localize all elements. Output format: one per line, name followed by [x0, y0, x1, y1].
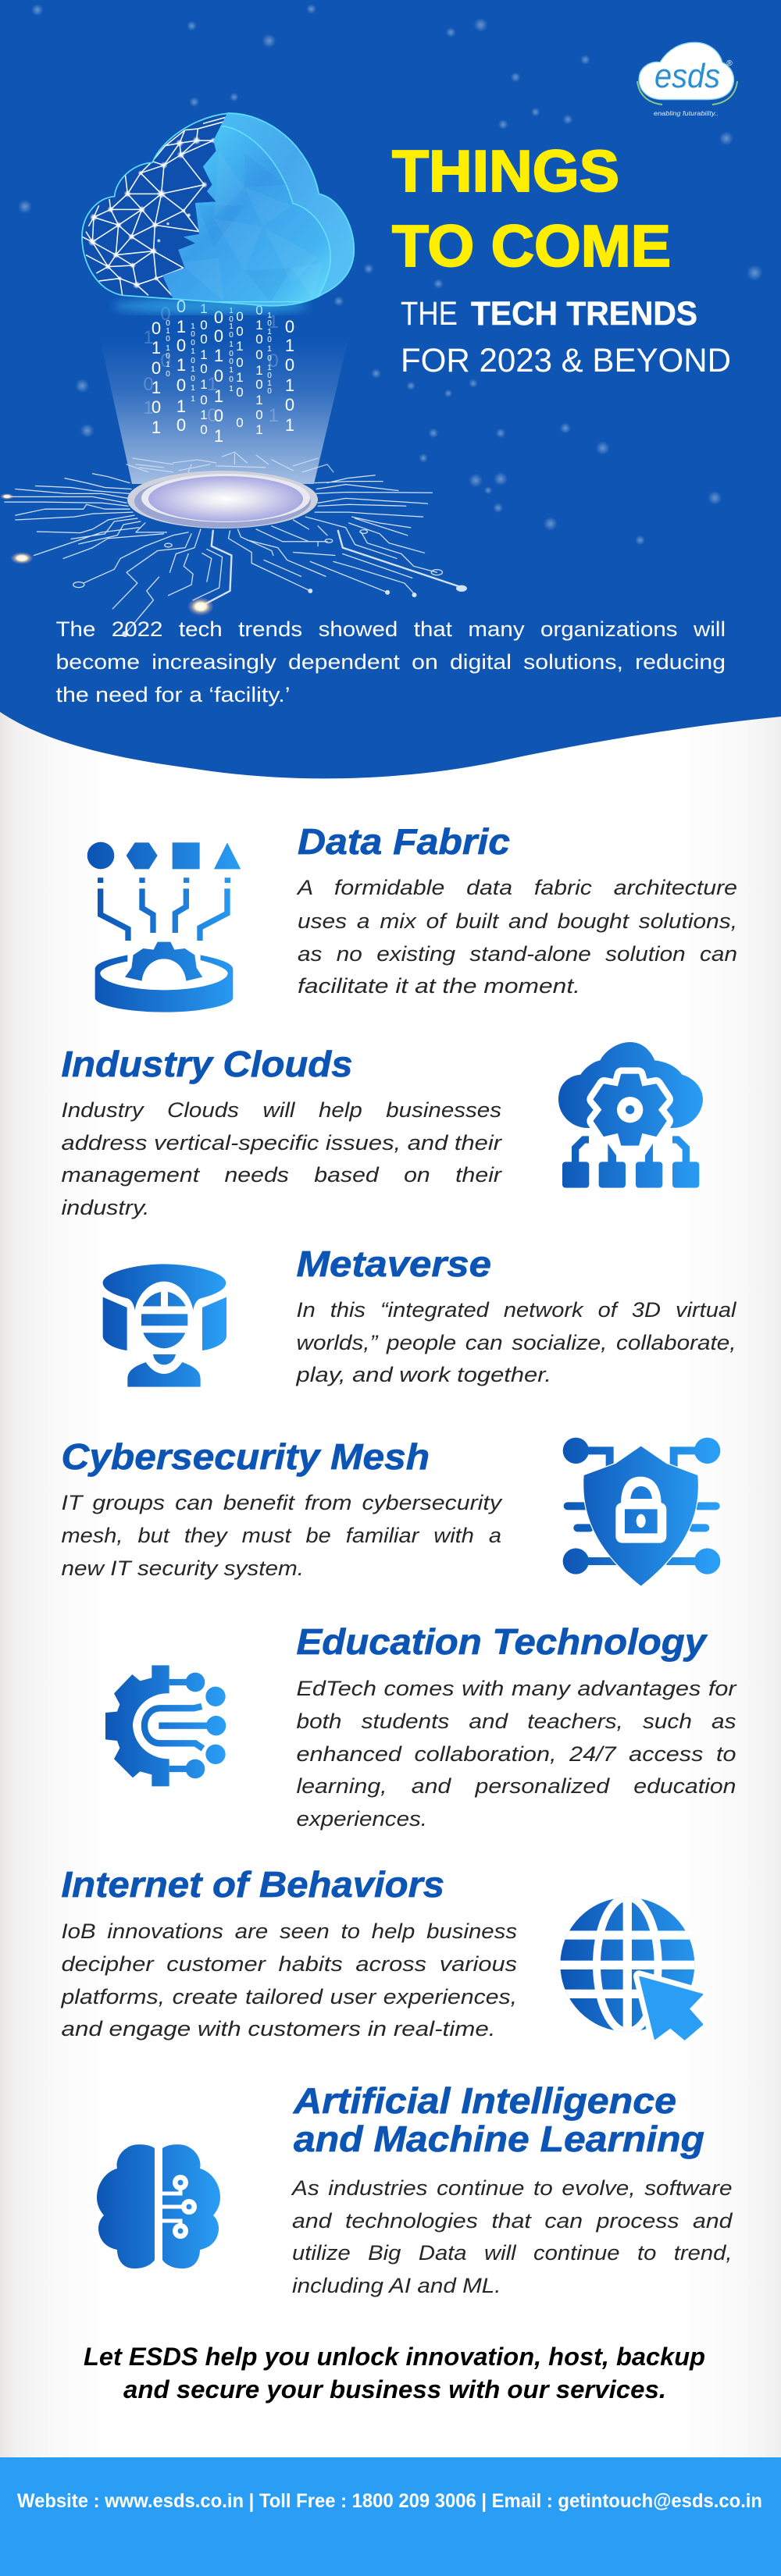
body text: both students and teachers, such as — [297, 1710, 736, 1733]
panel: Data Fabric — [87, 821, 737, 1012]
panel: Artificial Intelligence and Machine Learning — [97, 2080, 733, 2297]
body text — [61, 1491, 503, 1580]
heading: Metaverse — [297, 1244, 491, 1284]
body text: decipher customer habits across various — [61, 1952, 517, 1976]
glowing circuit spots — [0, 493, 214, 616]
binary data stream: 010101 — [285, 317, 294, 435]
subtitle — [401, 295, 731, 379]
body text: In this “integrated network of 3D virtual — [297, 1298, 737, 1322]
panel: Education Technology — [105, 1621, 737, 1831]
body text: as no existing stand-alone solution can — [298, 942, 737, 966]
panel: footer — [0, 2457, 781, 2576]
logo tagline: enabling futurability.. — [654, 109, 719, 117]
heading: and Machine Learning — [294, 2119, 704, 2159]
background star dots — [18, 4, 762, 545]
cloud body — [82, 113, 354, 306]
body text: management needs based on their — [61, 1163, 502, 1187]
heading: Education Technology — [297, 1621, 708, 1662]
heading: Industry Clouds — [61, 1044, 353, 1084]
registered mark: ® — [726, 59, 733, 68]
hero blue wave background — [0, 0, 781, 778]
logo wordmark: esds — [654, 57, 720, 95]
body text: IT groups can benefit from cybersecurity — [61, 1491, 503, 1514]
icon: metaverse — [103, 1264, 226, 1387]
binary data stream: 010101 — [152, 318, 161, 437]
subtitle: THE — [401, 295, 458, 333]
intro text — [56, 617, 726, 706]
binary data stream: 1010101010 — [267, 311, 272, 396]
mesh node sparks — [88, 137, 216, 289]
body text: new IT security system. — [61, 1557, 304, 1580]
contact details: Website : www.esds.co.in | Toll Free : 1800 209 3006 | Email : getintouch@esds.co.in — [17, 2490, 762, 2512]
binary data stream: 0100101011 — [143, 304, 279, 426]
logo: esds — [637, 42, 737, 117]
light beam — [100, 339, 348, 484]
body text: platforms, create tailored user experiences, — [60, 1985, 517, 2008]
body text: A formidable data fabric architecture — [296, 876, 737, 899]
title — [392, 138, 671, 279]
body text: worlds,” people can socialize, collaborate, — [297, 1331, 736, 1354]
footer bar — [0, 2457, 781, 2576]
call to action — [84, 2343, 705, 2403]
binary data stream: 100101011 — [191, 322, 195, 404]
cloud outline — [82, 113, 354, 306]
panel: Cybersecurity Mesh — [61, 1436, 720, 1586]
body text — [295, 1298, 737, 1386]
intro text: the need for a ‘facility.’ — [56, 683, 291, 706]
glow beneath cloud — [113, 298, 308, 314]
body text: industry. — [61, 1196, 150, 1219]
intro text: The 2022 tech trends showed that many organizations will — [56, 617, 726, 641]
call to action: and secure your business with our services. — [123, 2375, 666, 2403]
body text: As industries continue to evolve, software — [291, 2176, 733, 2200]
heading: Cybersecurity Mesh — [61, 1436, 430, 1477]
binary data stream: 010010101 — [255, 303, 263, 437]
solid blue cloud half — [162, 109, 357, 312]
page background — [0, 687, 781, 2467]
icon: globe with cursor — [557, 1895, 703, 2041]
icon: security shield — [563, 1438, 720, 1586]
icon: data fabric — [87, 842, 241, 1012]
title: THINGS — [392, 138, 619, 204]
body text: EdTech comes with many advantages for — [297, 1677, 737, 1700]
icon: AI brain — [97, 2144, 220, 2268]
heading — [293, 2080, 704, 2159]
binary data stream: 0101010 — [166, 319, 170, 379]
binary data stream: 0010101 — [214, 308, 223, 446]
subtitle: FOR 2023 & BEYOND — [401, 342, 731, 379]
heading: Internet of Behaviors — [61, 1864, 444, 1905]
binary data stream: 0101010 — [177, 297, 186, 435]
body text: Industry Clouds will help businesses — [61, 1098, 501, 1122]
body text: IoB innovations are seen to help business — [61, 1920, 517, 1943]
body text: and engage with customers in real-time. — [61, 2017, 495, 2041]
intro text: become increasingly dependent on digital solutions, reducing — [56, 650, 726, 674]
body text — [60, 1920, 517, 2041]
icon: education technology gear — [105, 1665, 226, 1786]
body text: utilize Big Data will continue to trend, — [292, 2241, 733, 2265]
binary data stream: 0010100 — [236, 309, 244, 430]
body text — [291, 2176, 733, 2297]
panel: Metaverse — [103, 1244, 737, 1387]
title: TO COME — [392, 213, 671, 279]
icon: digital cloud — [82, 109, 357, 312]
body text: including AI and ML. — [292, 2274, 501, 2297]
panel: hero header — [0, 0, 781, 778]
body text: experiences. — [297, 1807, 427, 1831]
call to action: Let ESDS help you unlock innovation, host, backup — [84, 2343, 705, 2371]
body text: enhanced collaboration, 24/7 access to — [297, 1742, 736, 1766]
logo cloud — [639, 42, 734, 100]
body text: address vertical-specific issues, and their — [61, 1131, 502, 1155]
panel: Industry Clouds — [61, 1042, 703, 1219]
body text: mesh, but they must be familiar with a — [61, 1524, 501, 1547]
panel: Internet of Behaviors — [60, 1864, 703, 2041]
body text: learning, and personalized education — [297, 1774, 736, 1798]
body text — [297, 1677, 737, 1831]
body text — [296, 876, 737, 998]
body text: and technologies that can process and — [292, 2209, 733, 2233]
heading: Artificial Intelligence — [293, 2080, 676, 2121]
icon: industry cloud gear — [558, 1042, 703, 1188]
cloud wireframe mesh — [82, 117, 226, 295]
body text: play, and work together. — [295, 1363, 551, 1386]
glowing disk — [127, 471, 318, 528]
circuit board traces — [5, 452, 466, 636]
logo green hands — [637, 81, 737, 105]
binary data stream: 1010100101 — [229, 307, 234, 393]
body text: facilitate it at the moment. — [298, 974, 580, 998]
binary data stream: 100101010 — [200, 301, 208, 437]
body text: uses a mix of built and bought solutions, — [298, 909, 737, 933]
heading: Data Fabric — [298, 821, 510, 862]
body text — [61, 1098, 502, 1219]
subtitle: TECH TRENDS — [471, 295, 697, 333]
